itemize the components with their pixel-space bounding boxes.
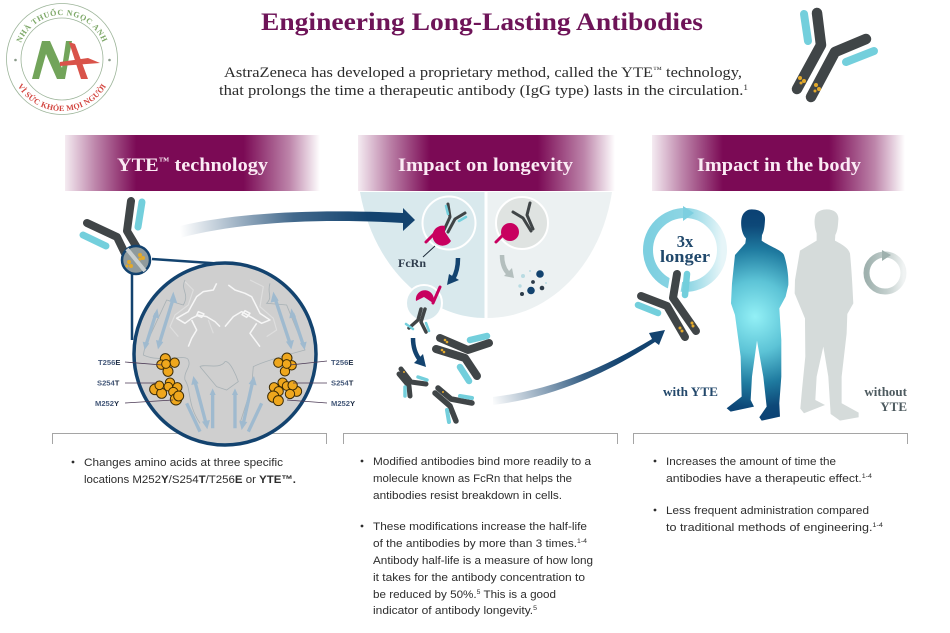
intro text xyxy=(219,65,748,99)
heading banner: YTE technology: YTE xyxy=(117,155,156,176)
label: FcRn: FcRn xyxy=(398,256,426,270)
icon: antibody with YTE xyxy=(638,273,696,337)
panel: text box Impact on longevity: These modifications increase the half-life xyxy=(373,521,587,533)
labels: amino acid positions xyxy=(95,358,355,408)
title: Engineering Long-Lasting Antibodies xyxy=(261,7,703,36)
figure: recycled antibody xyxy=(406,285,442,332)
icon: antibody top right xyxy=(797,13,874,97)
panel: text box Impact on longevity: antibodies resist breakdown in cells. xyxy=(373,490,562,502)
panel: text box Impact in the body: 1-4 xyxy=(862,473,872,480)
arrow: down to antibodies xyxy=(413,338,426,367)
panel: text box YTE technology xyxy=(52,434,326,486)
icon: breakdown particles xyxy=(518,270,547,296)
figure: FcRn bound antibody xyxy=(422,196,476,250)
panel: text box Impact in the body xyxy=(634,434,908,534)
labels: amino acid positions: T256E xyxy=(331,358,353,367)
labels: amino acid positions: T256E xyxy=(98,358,120,367)
panel: text box Impact in the body: to traditional methods of engineering. xyxy=(666,522,850,534)
intro text: AstraZeneca has developed a proprietary method, called the YTE xyxy=(224,65,603,81)
logo: Nha Thuoc Ngoc Anh seal xyxy=(6,3,118,115)
intro text: technology, xyxy=(662,65,742,81)
icon: large antibody xyxy=(436,336,489,381)
labels: amino acid positions: M252Y xyxy=(331,399,355,408)
heading banner: YTE technology xyxy=(65,135,320,191)
figure: unbound antibody xyxy=(496,197,548,249)
heading banner: Impact on longevity: Impact on longevity xyxy=(398,155,574,176)
icon: antibody with magnifier xyxy=(83,201,225,340)
icon: small grey ring xyxy=(866,250,904,292)
chart: magnified antibody structure xyxy=(134,263,316,445)
panel: text box YTE technology: locations M252Y/S254T/T256E or YTE™. xyxy=(84,474,296,486)
panel: longevity semicircle xyxy=(360,192,612,318)
labels: amino acid positions: S254T xyxy=(97,378,120,388)
panel: text box Impact on longevity: indicator of antibody longevity. xyxy=(373,605,523,617)
heading banner: Impact in the body: Impact in the body xyxy=(697,155,862,176)
panel: text box Impact on longevity: of the antibodies by more than 3 times. xyxy=(373,538,566,550)
label: without YTE xyxy=(864,384,908,414)
panel: text box Impact in the body: Less frequent administration compared xyxy=(666,505,869,517)
heading banner: Impact in the body xyxy=(652,135,905,191)
icon: 3x longer ring: longer xyxy=(660,247,710,266)
heading banner: YTE technology: technology xyxy=(169,155,269,176)
icon: small antibody right xyxy=(435,388,472,422)
panel: text box Impact on longevity: 1-4 xyxy=(577,538,587,545)
arrow: grey degradation xyxy=(502,255,514,278)
amino acid cluster: left xyxy=(150,354,184,405)
arrow: longevity to body xyxy=(493,330,665,405)
panel: text box YTE technology: Changes amino acids at three specific xyxy=(84,457,283,469)
panel: text box Impact on longevity: it takes for the antibody concentration to xyxy=(373,572,585,584)
labels: amino acid positions: S254T xyxy=(331,378,354,388)
beta strands xyxy=(143,292,307,432)
label: without YTE: YTE xyxy=(880,399,907,414)
glycan skeleton xyxy=(177,283,220,327)
arrow: YTE to longevity xyxy=(180,208,415,238)
figure: man without YTE xyxy=(795,209,859,421)
panel: text box Impact on longevity: molecule known as FcRn that helps the xyxy=(373,473,572,485)
panel: text box Impact in the body: Increases the amount of time the xyxy=(666,456,836,468)
panel: text box Impact on longevity: This is a good xyxy=(480,589,556,601)
arrow: down from FcRn xyxy=(447,258,459,285)
label: FcRn xyxy=(398,246,435,270)
intro text: 1 xyxy=(743,83,748,92)
icon: 3x longer ring: 3x xyxy=(677,232,694,251)
amino acid cluster: right xyxy=(268,353,302,406)
panel: text box Impact on longevity: be reduced by 50%. xyxy=(373,589,473,601)
icon: small antibody left xyxy=(399,369,427,396)
figure: man with YTE xyxy=(727,209,788,421)
panel: text box Impact on longevity: Modified antibodies bind more readily to a xyxy=(373,456,592,468)
intro text: that prolongs the time a therapeutic antibody (IgG type) lasts in the circulation. xyxy=(219,83,678,99)
panel: text box Impact in the body: antibodies have a therapeutic effect. xyxy=(666,473,846,485)
label: with YTE: with YTE xyxy=(663,384,718,399)
icon: 3x longer ring xyxy=(648,206,722,287)
panel: text box Impact on longevity xyxy=(344,434,618,617)
strand outline xyxy=(143,280,305,423)
labels: amino acid positions: M252Y xyxy=(95,399,119,408)
label: without YTE: without xyxy=(864,384,908,399)
panel: text box Impact on longevity: Antibody half-life is a measure of how long xyxy=(373,555,593,567)
panel: text box Impact on longevity: 5 xyxy=(533,605,537,612)
heading banner: Impact on longevity xyxy=(358,135,615,191)
logo: Nha Thuoc Ngoc Anh seal: NHÀ THUỐC NGỌC ANH xyxy=(16,8,108,43)
intro text: ™ xyxy=(653,65,662,74)
panel: text box Impact on longevity: 5 xyxy=(477,589,481,596)
heading banner: YTE technology: ™ xyxy=(159,156,169,167)
logo: Nha Thuoc Ngoc Anh seal: VÌ SỨC KHỎE MỌI NGƯỜI xyxy=(18,83,106,111)
panel: text box Impact in the body: 1-4 xyxy=(872,522,883,529)
